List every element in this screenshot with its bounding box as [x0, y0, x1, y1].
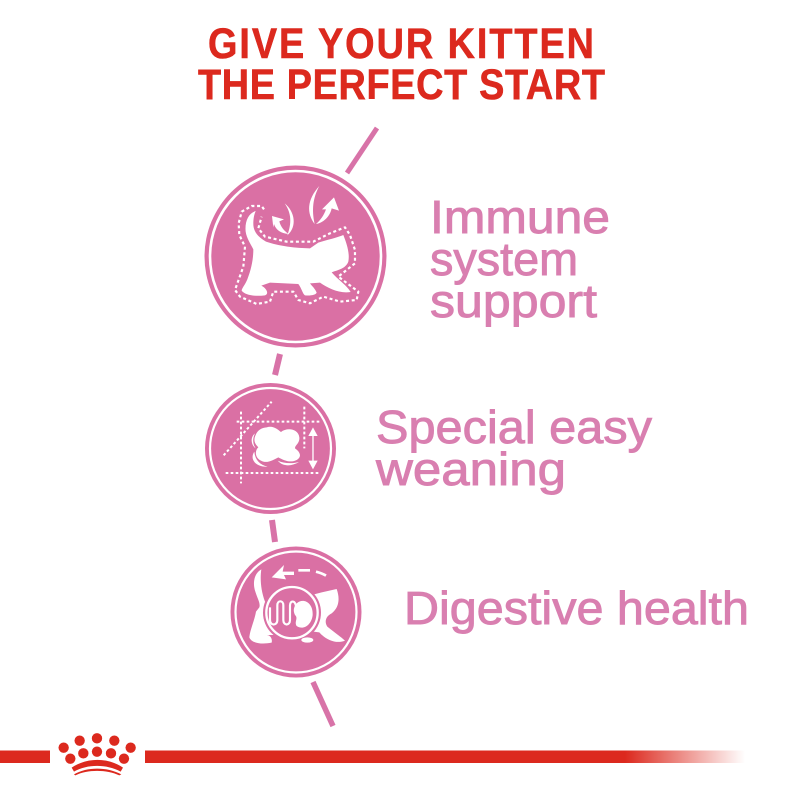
- text: special easy weaning: Special easy: [376, 401, 652, 453]
- text: digestive health: Digestive health: [404, 582, 749, 634]
- icon: easy weaning kibble: [205, 383, 336, 514]
- connector line: lower middle: [272, 520, 275, 542]
- footer line: left: [0, 750, 50, 763]
- connector line: upper middle: [275, 354, 280, 375]
- text: special easy weaning: weaning: [375, 443, 566, 495]
- icon: digestive health kitten: [230, 546, 362, 678]
- logo: crown: [58, 733, 136, 775]
- text: immune system support: Immune: [430, 191, 610, 243]
- text: special easy weaning: [375, 401, 652, 495]
- connector line: top: [347, 128, 377, 173]
- text: immune system support: system: [430, 233, 578, 285]
- title: GIVE YOUR KITTEN: [208, 19, 594, 68]
- title: THE PERFECT START: [198, 60, 605, 109]
- text: immune system support: support: [430, 275, 597, 327]
- text: immune system support: [430, 191, 610, 327]
- icon: immune system kitten: [204, 166, 386, 348]
- title: [198, 19, 605, 109]
- connector line: bottom: [313, 682, 333, 726]
- footer line: right fading: [145, 750, 745, 763]
